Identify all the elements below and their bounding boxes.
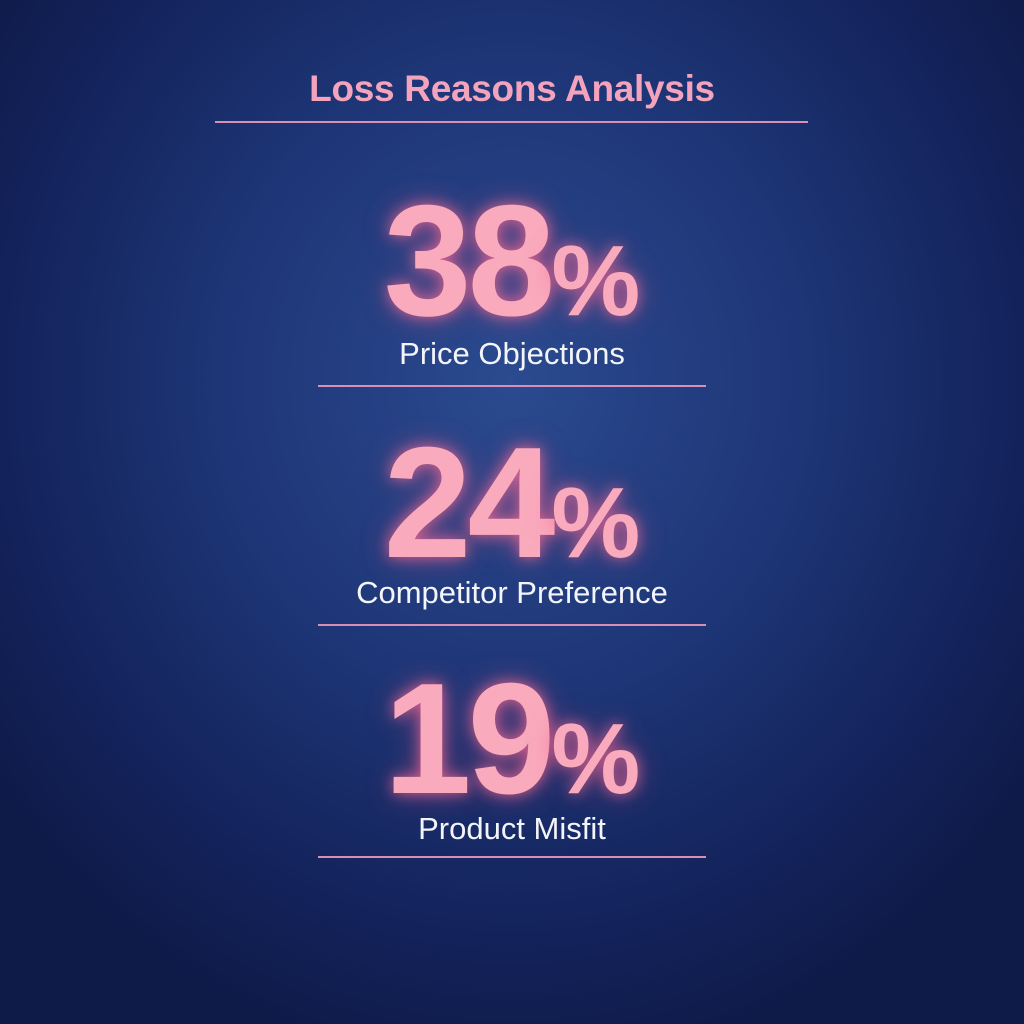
label: product misfit: Product Misfit <box>418 811 606 846</box>
label: price objections: Price Objections <box>399 336 625 371</box>
title: Loss Reasons Analysis <box>309 68 715 109</box>
label: competitor preference: Competitor Preference <box>356 575 668 610</box>
stat: 38%: 38% <box>384 173 640 349</box>
stat: 24%: 24% <box>384 415 640 591</box>
stat: 19%: 19% <box>384 651 640 827</box>
